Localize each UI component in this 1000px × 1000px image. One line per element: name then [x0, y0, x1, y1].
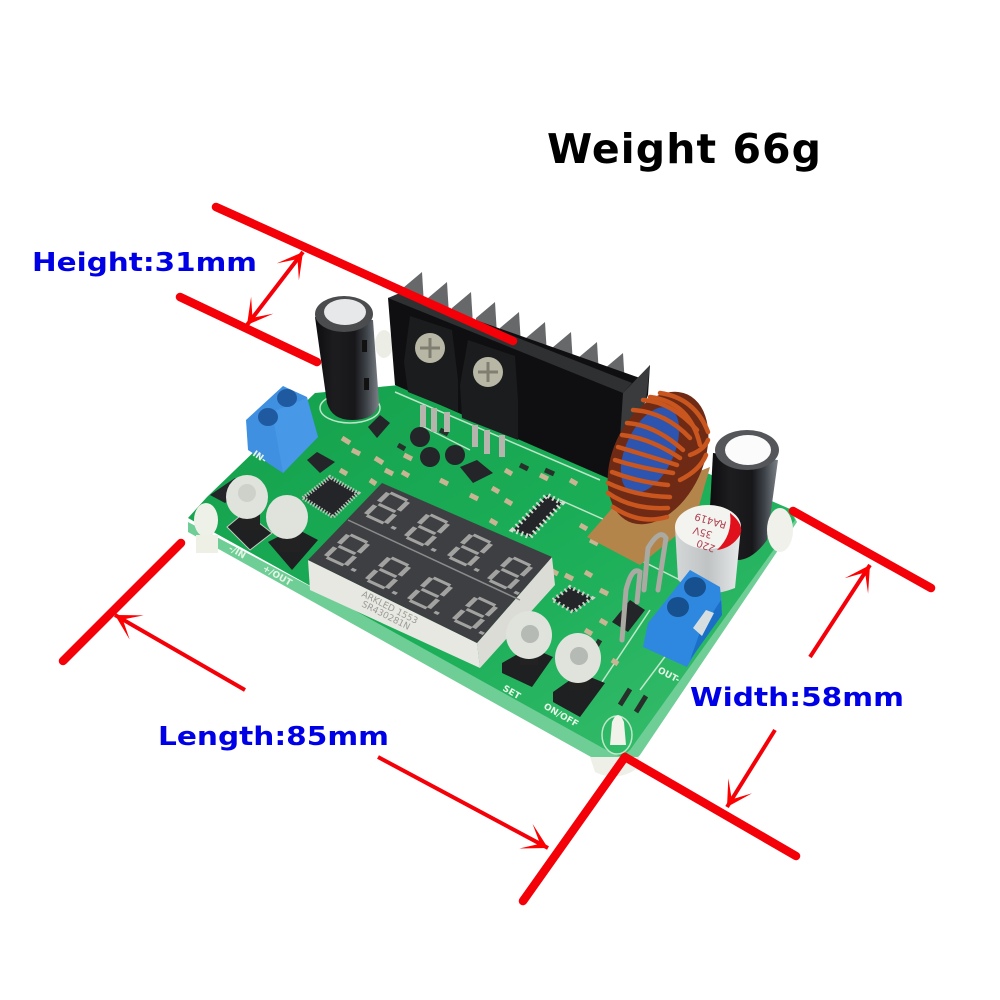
title: weight: Weight 66g: [547, 125, 821, 173]
rear standoff: [375, 330, 393, 358]
chips and inductors: [210, 415, 645, 632]
heat sink: [388, 272, 650, 480]
heat sink fins: [403, 272, 625, 386]
circuit board: [188, 385, 797, 770]
perf board: [587, 467, 710, 565]
board silkscreen labels: SET: [500, 684, 522, 702]
board silkscreen labels: +/OUT: [260, 564, 294, 589]
red measurement lines: [63, 207, 931, 901]
display label: SR430281N: [360, 600, 411, 633]
inductor coil: [588, 376, 728, 540]
silver SMD capacitor: [675, 505, 741, 593]
silver SMD capacitor: 35V: [692, 524, 714, 540]
board silkscreen labels: ON/OFF: [542, 702, 580, 730]
label: length: Length:85mm: [158, 722, 389, 752]
label: width: Width:58mm: [690, 683, 904, 713]
button: ON/OFF: [553, 633, 605, 717]
input capacitor: [315, 296, 379, 420]
screw right: [473, 357, 503, 387]
transistor right: [460, 340, 518, 440]
transistor left: [404, 316, 458, 412]
board silkscreen labels: OUT-: [656, 666, 681, 686]
display label: ARKLED 1553: [360, 590, 419, 627]
screw left: [415, 333, 445, 363]
board silkscreen labels: -/IN: [226, 544, 247, 562]
left standoff: [194, 503, 218, 553]
label: height: Height:31mm: [32, 248, 257, 278]
button: -/IN: [226, 475, 272, 550]
button: +/OUT: [266, 495, 318, 570]
silver SMD capacitor: RA419: [694, 510, 728, 530]
board silkscreen labels: [226, 449, 681, 730]
blue input terminal: [246, 386, 318, 473]
silver SMD capacitor: 220: [695, 537, 717, 554]
wire links: [622, 535, 666, 640]
board silkscreen labels: IN-: [250, 449, 268, 466]
LED display module: [308, 483, 555, 668]
button: SET: [502, 611, 553, 687]
display digits: [322, 490, 544, 635]
dimension arrows: [115, 252, 870, 848]
blue output terminal: [643, 570, 722, 667]
board silk and small components: [320, 392, 700, 754]
output capacitor: [710, 430, 779, 560]
right standoff: [767, 508, 793, 552]
front standoff: [590, 715, 640, 777]
transistor pins: [423, 405, 502, 457]
